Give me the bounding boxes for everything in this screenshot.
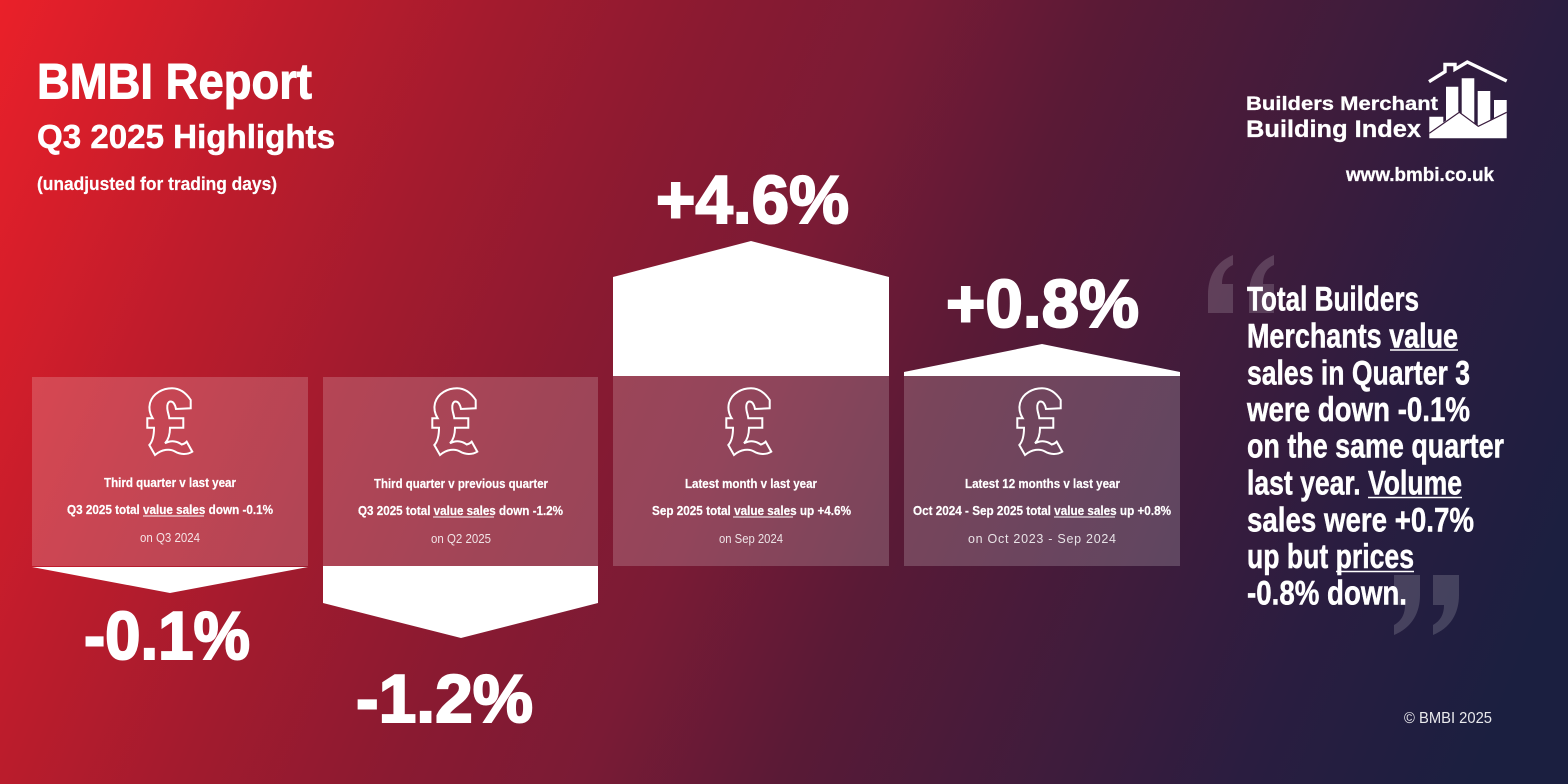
panel label: Latest month v last year xyxy=(685,477,817,491)
copyright: © BMBI 2025 xyxy=(1404,710,1492,727)
panel statement: Q3 2025 total value sales down -1.2% xyxy=(358,504,563,518)
panel statement: Oct 2024 - Sep 2025 total value sales up +0.8% xyxy=(913,504,1171,518)
value: -0.1%: -0.1% xyxy=(84,598,250,674)
underline: value sales xyxy=(1054,516,1115,518)
quote block xyxy=(1208,255,1504,635)
panel statement: Sep 2025 total value sales up +4.6% xyxy=(652,504,851,518)
panel comparison: on Q2 2025 xyxy=(431,532,491,546)
arrow: down small xyxy=(32,567,308,593)
panel: third quarter v last year xyxy=(32,377,308,674)
panel comparison: on Oct 2023 - Sep 2024 xyxy=(968,532,1116,546)
subheading: Q3 2025 Highlights: Q3 2025 Highlights xyxy=(37,118,335,155)
panel statement: Q3 2025 total value sales down -0.1% xyxy=(67,503,273,517)
arrow: up small xyxy=(904,344,1180,376)
quote text xyxy=(1246,280,1504,612)
quote text: last year. Volume xyxy=(1247,464,1462,502)
quote text: on the same quarter xyxy=(1247,428,1504,466)
icon: house with bars xyxy=(1429,62,1507,138)
panel background xyxy=(904,376,1180,566)
value: -1.2%: -1.2% xyxy=(356,661,533,737)
icon: pound xyxy=(147,388,192,455)
underline: value sales xyxy=(143,515,204,517)
logo text line 2: Building Index xyxy=(1246,116,1422,143)
underline: value sales xyxy=(433,516,494,518)
panel comparison: on Q3 2024 xyxy=(140,531,200,545)
icon: pound xyxy=(726,388,771,455)
panel background xyxy=(613,376,889,566)
underline: value sales xyxy=(733,516,793,518)
panel label: Third quarter v previous quarter xyxy=(374,477,548,491)
quote text: sales in Quarter 3 xyxy=(1247,354,1470,392)
panel: third quarter v previous quarter xyxy=(323,377,598,737)
icon: pound xyxy=(432,388,477,455)
arrow: up large xyxy=(613,241,889,376)
website: www.bmbi.co.uk xyxy=(1345,165,1494,186)
icon: opening quote mark xyxy=(1208,255,1274,313)
title block xyxy=(37,54,335,194)
quote text: up but prices xyxy=(1247,538,1414,576)
quote text: Merchants value xyxy=(1247,318,1458,356)
quote text: -0.8% down. xyxy=(1247,574,1407,612)
quote text: were down -0.1% xyxy=(1246,391,1470,429)
logo: Builders Merchant Building Index xyxy=(1246,62,1507,186)
arrow: down large xyxy=(323,566,598,638)
panel label: Latest 12 months v last year xyxy=(965,477,1120,491)
panel background xyxy=(323,377,598,566)
quote text: sales were +0.7% xyxy=(1247,502,1474,540)
value: +4.6%: +4.6% xyxy=(656,162,849,238)
panel: latest month v last year xyxy=(613,162,889,566)
heading: BMBI Report: BMBI Report xyxy=(37,54,312,110)
icon: closing quote mark xyxy=(1394,575,1459,635)
quote text: Total Builders xyxy=(1247,280,1419,318)
value: +0.8%: +0.8% xyxy=(946,266,1139,342)
icon: pound xyxy=(1017,388,1062,455)
panel label: Third quarter v last year xyxy=(104,476,236,490)
panel: latest 12 months v last year xyxy=(904,266,1180,566)
panel comparison: on Sep 2024 xyxy=(719,532,783,546)
note: unadjusted: (unadjusted for trading days) xyxy=(37,174,277,194)
logo text line 1: Builders Merchant xyxy=(1246,93,1439,115)
panel background xyxy=(32,377,308,566)
